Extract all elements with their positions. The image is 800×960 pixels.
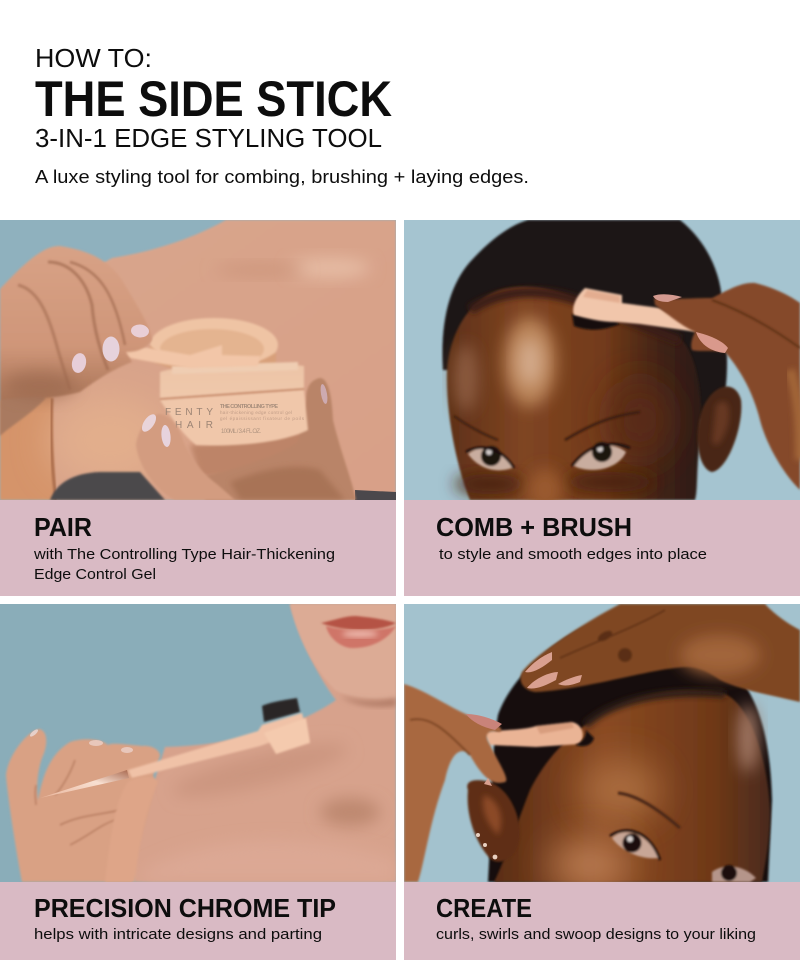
forehead and face <box>494 690 770 882</box>
brush bristles <box>572 314 620 330</box>
header <box>35 43 529 187</box>
ear <box>467 780 520 862</box>
photo: styling baby hairs <box>404 604 800 890</box>
neck and shoulder <box>130 604 396 882</box>
eyebrows <box>454 416 498 440</box>
face <box>447 287 701 500</box>
left hand <box>404 684 506 882</box>
hair <box>488 620 772 882</box>
caption box <box>404 882 800 960</box>
jar label: HAIR <box>175 420 213 431</box>
hand <box>654 283 800 490</box>
panel: precision chrome tip <box>0 604 396 960</box>
fingernails <box>653 294 682 302</box>
palm and right finger behind jar <box>205 378 356 500</box>
caption text: helps with intricate designs and parting <box>34 926 322 943</box>
caption text: with The Controlling Type Hair-Thickening <box>33 546 335 563</box>
title: how to: HOW TO: <box>35 43 152 73</box>
shadow under jar <box>190 434 300 476</box>
eyes <box>610 831 756 882</box>
jar lid (open) <box>150 318 308 446</box>
stick handle and head <box>128 713 310 778</box>
nails <box>525 652 552 672</box>
lips <box>321 616 396 648</box>
chin <box>290 604 396 699</box>
hand <box>6 729 160 882</box>
side stick in jar <box>126 345 260 366</box>
arm shadow line <box>51 398 56 500</box>
subtitle: 3-IN-1 EDGE STYLING TOOL <box>35 123 382 153</box>
fingernails <box>131 324 149 338</box>
lower hand fingers <box>136 414 235 500</box>
eyebrow <box>618 793 680 828</box>
caption box <box>404 500 800 596</box>
panel: pair <box>0 220 396 596</box>
upper hand <box>0 246 152 436</box>
top hand <box>521 604 800 702</box>
caption text: curls, swirls and swoop designs to your liking <box>436 926 756 943</box>
caption box <box>0 500 396 596</box>
chest and shoulder <box>0 220 396 500</box>
chrome tip <box>40 770 129 798</box>
jar label <box>165 404 305 435</box>
photo: holding side stick <box>0 604 396 882</box>
photo: hands opening gel jar <box>0 220 396 500</box>
heading: precision chrome tip: PRECISION CHROME TIP <box>34 893 336 923</box>
comb head and handle <box>573 288 700 332</box>
jar label: THE CONTROLLING TYPE <box>220 404 278 410</box>
eyes <box>466 442 630 470</box>
caption box <box>0 882 396 960</box>
caption box: Edge Control Gel <box>34 566 156 583</box>
photo: combing hairline <box>404 220 800 512</box>
jar body <box>160 364 304 400</box>
caption text: to style and smooth edges into place <box>439 546 707 563</box>
jar label: hair-thickening edge control gel <box>220 410 292 415</box>
heading: comb + brush: COMB + BRUSH <box>436 512 632 542</box>
heading: pair: PAIR <box>34 512 92 542</box>
panel: create <box>404 604 800 960</box>
jar label: FENTY <box>165 407 213 418</box>
jar label: 100ML / 3.4 FL OZ. <box>221 429 261 435</box>
thumb <box>105 777 158 882</box>
panel: comb + brush <box>404 220 800 596</box>
jar label: gel épaississant fixateur de poils <box>220 416 305 421</box>
heading: create: CREATE <box>436 893 532 923</box>
ear <box>697 387 741 472</box>
description: A luxe styling tool for combing, brushing + laying edges. <box>35 167 529 187</box>
hair <box>442 220 727 420</box>
side stick <box>484 722 583 747</box>
dark top <box>50 472 165 500</box>
title: the side stick: THE SIDE STICK <box>35 71 392 127</box>
nose <box>527 468 563 512</box>
bristles <box>262 698 300 722</box>
